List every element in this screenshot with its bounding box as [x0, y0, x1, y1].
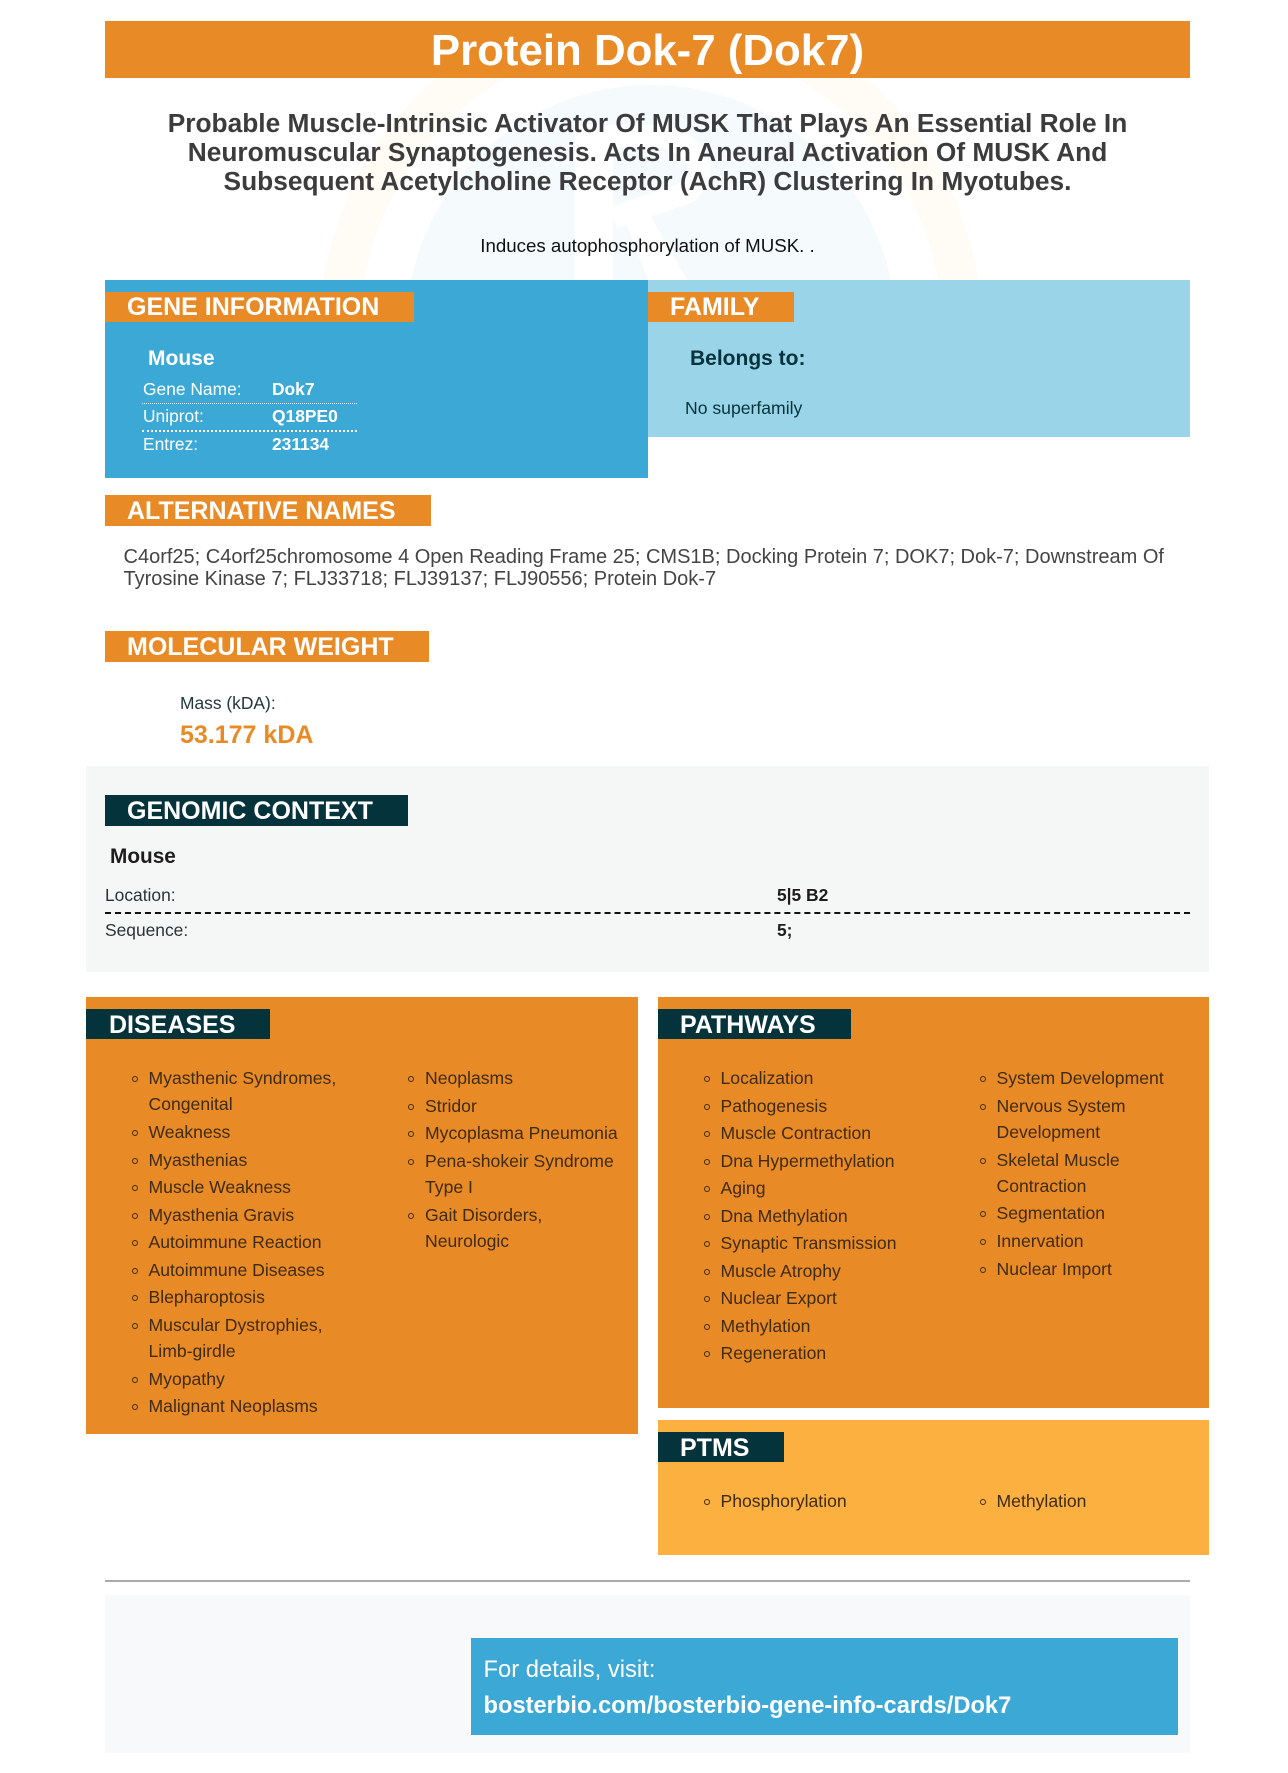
panel: gene information	[105, 280, 648, 478]
pathways list column 2	[980, 1068, 1164, 1279]
callout: details link	[471, 1638, 1178, 1735]
diseases list column 2: Neoplasms	[425, 1068, 513, 1088]
subtitle description: Probable Muscle-Intrinsic Activator Of MUSK That Plays An Essential Role In	[168, 108, 1127, 138]
gene details table	[142, 379, 357, 454]
location row: Location:	[105, 885, 176, 905]
pathways list column 1: Regeneration	[720, 1343, 826, 1363]
species name: Mouse	[148, 347, 215, 370]
ptms item 2: Methylation	[996, 1491, 1086, 1511]
pathways list column 1: Muscle Contraction	[720, 1123, 871, 1143]
diseases list column 2: Pena-shokeir Syndrome Type I	[425, 1151, 614, 1197]
sequence row: Sequence:	[105, 920, 188, 940]
heading: gene information: GENE INFORMATION	[127, 293, 379, 321]
pathways list column 1: Localization	[720, 1068, 813, 1088]
panel: genomic context	[86, 766, 1209, 972]
gene details table: Entrez:	[143, 434, 198, 454]
panel: diseases	[86, 997, 638, 1434]
alternative names text: Tyrosine Kinase 7; FLJ33718; FLJ39137; FLJ90556; Protein Dok-7	[124, 568, 716, 590]
gene details table: Q18PE0	[272, 406, 338, 426]
diseases list column 1: Malignant Neoplasms	[148, 1396, 318, 1416]
mass value: 53.177 kDA	[180, 721, 313, 749]
panel: family	[648, 280, 1190, 437]
url: bosterbio.com/bosterbio-gene-info-cards/Dok7	[484, 1693, 1011, 1719]
panel: footer	[105, 1595, 1190, 1753]
pathways list column 1: Dna Hypermethylation	[720, 1151, 895, 1171]
heading: diseases	[86, 1009, 270, 1039]
location row	[105, 885, 828, 905]
gene details table: Dok7	[272, 379, 315, 399]
diseases list column 1	[132, 1068, 336, 1416]
pathways list column 1: Dna Methylation	[720, 1206, 848, 1226]
location row: 5|5 B2	[777, 885, 828, 905]
gene details table: Gene Name:	[143, 379, 242, 399]
heading: pathways	[658, 1009, 851, 1039]
heading: family	[648, 292, 794, 322]
pathways list column 1: Nuclear Export	[720, 1288, 837, 1308]
pathways list column 1: Synaptic Transmission	[720, 1233, 897, 1253]
diseases list column 1: Muscular Dystrophies, Limb-girdle	[148, 1315, 323, 1361]
heading: genomic context: GENOMIC CONTEXT	[127, 797, 373, 825]
pathways list column 1	[704, 1068, 897, 1363]
heading: ptms	[658, 1432, 784, 1462]
heading: pathways: PATHWAYS	[680, 1011, 816, 1039]
superfamily text: No superfamily	[685, 398, 802, 418]
diseases list column 1: Muscle Weakness	[148, 1177, 291, 1197]
heading: family: FAMILY	[670, 293, 759, 321]
pathways list column 2: System Development	[996, 1068, 1164, 1088]
diseases list column 1: Blepharoptosis	[148, 1287, 265, 1307]
alternative names text: C4orf25; C4orf25chromosome 4 Open Reading Frame 25; CMS1B; Docking Protein 7; DOK7; Dok-7; Downstream Of	[124, 546, 1164, 568]
diseases list column 2: Mycoplasma Pneumonia	[425, 1123, 618, 1143]
pathways list column 1: Pathogenesis	[720, 1096, 827, 1116]
diseases list column 1: Autoimmune Reaction	[148, 1232, 322, 1252]
diseases list column 1: Myasthenia Gravis	[148, 1205, 294, 1225]
ptms item 1: Phosphorylation	[720, 1491, 847, 1511]
subtitle description	[168, 108, 1127, 196]
gene details table: Uniprot:	[143, 406, 204, 426]
sequence row	[105, 920, 792, 940]
panel: pathways	[658, 997, 1209, 1408]
heading: ptms: PTMS	[680, 1434, 749, 1462]
diseases list column 2: Stridor	[425, 1096, 477, 1116]
diseases list column 1: Autoimmune Diseases	[148, 1260, 325, 1280]
watermark logo	[324, 78, 978, 280]
pathways list column 2: Segmentation	[996, 1203, 1105, 1223]
diseases list column 1: Myopathy	[148, 1369, 225, 1389]
diseases list column 2: Gait Disorders, Neurologic	[425, 1205, 542, 1251]
alternative names text	[124, 546, 1164, 590]
panel: ptms	[658, 1420, 1209, 1555]
subtitle description: Subsequent Acetylcholine Receptor (AchR) Clustering In Myotubes.	[224, 166, 1071, 196]
pathways list column 2: Skeletal Muscle Contraction	[996, 1150, 1120, 1196]
title banner: Protein Dok-7 (Dok7)	[431, 26, 864, 75]
heading: alternative names: ALTERNATIVE NAMES	[127, 497, 396, 525]
pathways list column 1: Aging	[720, 1178, 766, 1198]
pathways list column 2: Nervous System Development	[996, 1096, 1126, 1142]
diseases list column 1: Weakness	[148, 1122, 230, 1142]
diseases list column 2	[408, 1068, 618, 1251]
subtitle description: Neuromuscular Synaptogenesis. Acts In Aneural Activation Of MUSK And	[188, 137, 1107, 167]
title banner	[105, 21, 1190, 78]
species name: Mouse	[110, 845, 176, 868]
pathways list column 2: Nuclear Import	[996, 1259, 1112, 1279]
pathways list column 1: Muscle Atrophy	[720, 1261, 841, 1281]
pathways list column 2: Innervation	[996, 1231, 1084, 1251]
gene details table: 231134	[272, 434, 329, 454]
diseases list column 1: Myasthenias	[148, 1150, 247, 1170]
pathways list column 1: Methylation	[720, 1316, 810, 1336]
belongs to label: Belongs to:	[690, 347, 806, 370]
heading: molecular weight: MOLECULAR WEIGHT	[127, 633, 394, 661]
mass label: Mass (kDA):	[180, 693, 276, 713]
sequence row: 5;	[777, 920, 792, 940]
diseases list column 1: Myasthenic Syndromes, Congenital	[148, 1068, 336, 1114]
visit label: For details, visit:	[484, 1656, 655, 1683]
heading: diseases: DISEASES	[109, 1011, 235, 1039]
function note: Induces autophosphorylation of MUSK. .	[480, 235, 815, 256]
